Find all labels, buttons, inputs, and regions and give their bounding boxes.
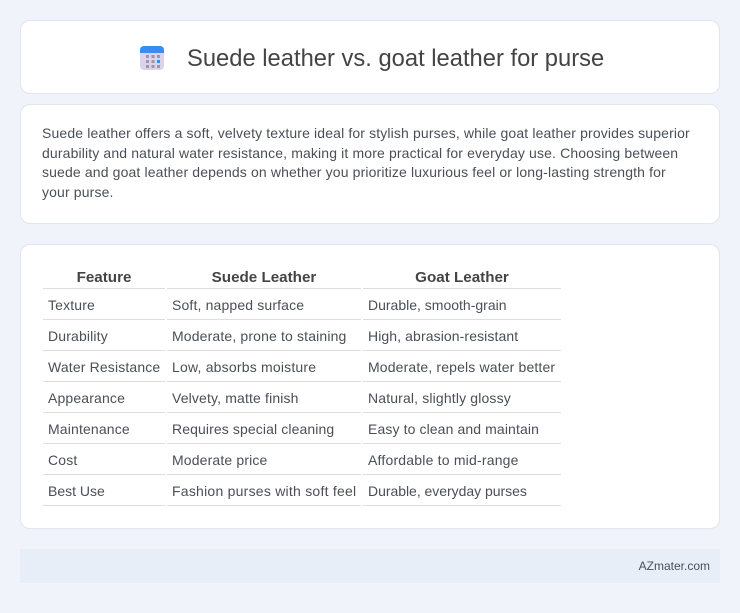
footer brand: AZmater.com	[639, 559, 710, 573]
title: Suede leather vs. goat leather for purse	[187, 45, 604, 72]
row: Durability: Moderate, prone to staining	[172, 328, 346, 344]
row: Cost: Cost	[48, 452, 77, 468]
row: Cost: Moderate price	[172, 452, 267, 468]
table panel	[20, 244, 720, 529]
row: Best Use	[43, 483, 561, 506]
row: Water Resistance: Moderate, repels water better	[368, 359, 555, 375]
row: Best Use: Fashion purses with soft feel	[172, 483, 356, 499]
row: Appearance: Appearance	[48, 390, 125, 406]
row: Cost	[43, 452, 561, 475]
column headers: Feature	[77, 269, 131, 286]
row: Best Use: Best Use	[48, 483, 105, 499]
row: Cost: Affordable to mid-range	[368, 452, 519, 468]
row: Appearance: Velvety, matte finish	[172, 390, 299, 406]
row: Maintenance: Easy to clean and maintain	[368, 421, 539, 437]
intro paragraph: durability and natural water resistance, making it more practical for everyday use. Choosing between	[42, 145, 678, 161]
row: Texture: Soft, napped surface	[172, 297, 304, 313]
row: Durability: High, abrasion-resistant	[368, 328, 518, 344]
row: Water Resistance: Low, absorbs moisture	[172, 359, 316, 375]
footer bar	[20, 549, 720, 583]
intro paragraph: your purse.	[42, 184, 114, 200]
intro paragraph: suede and goat leather depends on whether you prioritize luxurious feel or long-lasting strength for	[42, 164, 666, 180]
row: Texture	[43, 297, 561, 320]
column headers: Suede Leather	[212, 269, 316, 286]
row: Appearance	[43, 390, 561, 413]
column headers: Goat Leather	[415, 269, 509, 286]
row: Appearance: Natural, slightly glossy	[368, 390, 511, 406]
row: Maintenance: Requires special cleaning	[172, 421, 334, 437]
row: Water Resistance: Water Resistance	[48, 359, 160, 375]
intro paragraph: Suede leather offers a soft, velvety texture ideal for stylish purses, while goat leather provides superior	[42, 125, 690, 141]
intro text panel	[20, 104, 720, 224]
header card	[20, 20, 720, 94]
row: Texture: Durable, smooth-grain	[368, 297, 507, 313]
column headers	[43, 269, 561, 289]
row: Maintenance: Maintenance	[48, 421, 130, 437]
intro paragraph	[42, 125, 690, 200]
icon: calendar	[140, 46, 164, 70]
row: Durability: Durability	[48, 328, 108, 344]
row: Maintenance	[43, 421, 561, 444]
row: Water Resistance	[43, 359, 561, 382]
row: Texture: Texture	[48, 297, 95, 313]
row: Best Use: Durable, everyday purses	[368, 483, 527, 499]
row: Durability	[43, 328, 561, 351]
